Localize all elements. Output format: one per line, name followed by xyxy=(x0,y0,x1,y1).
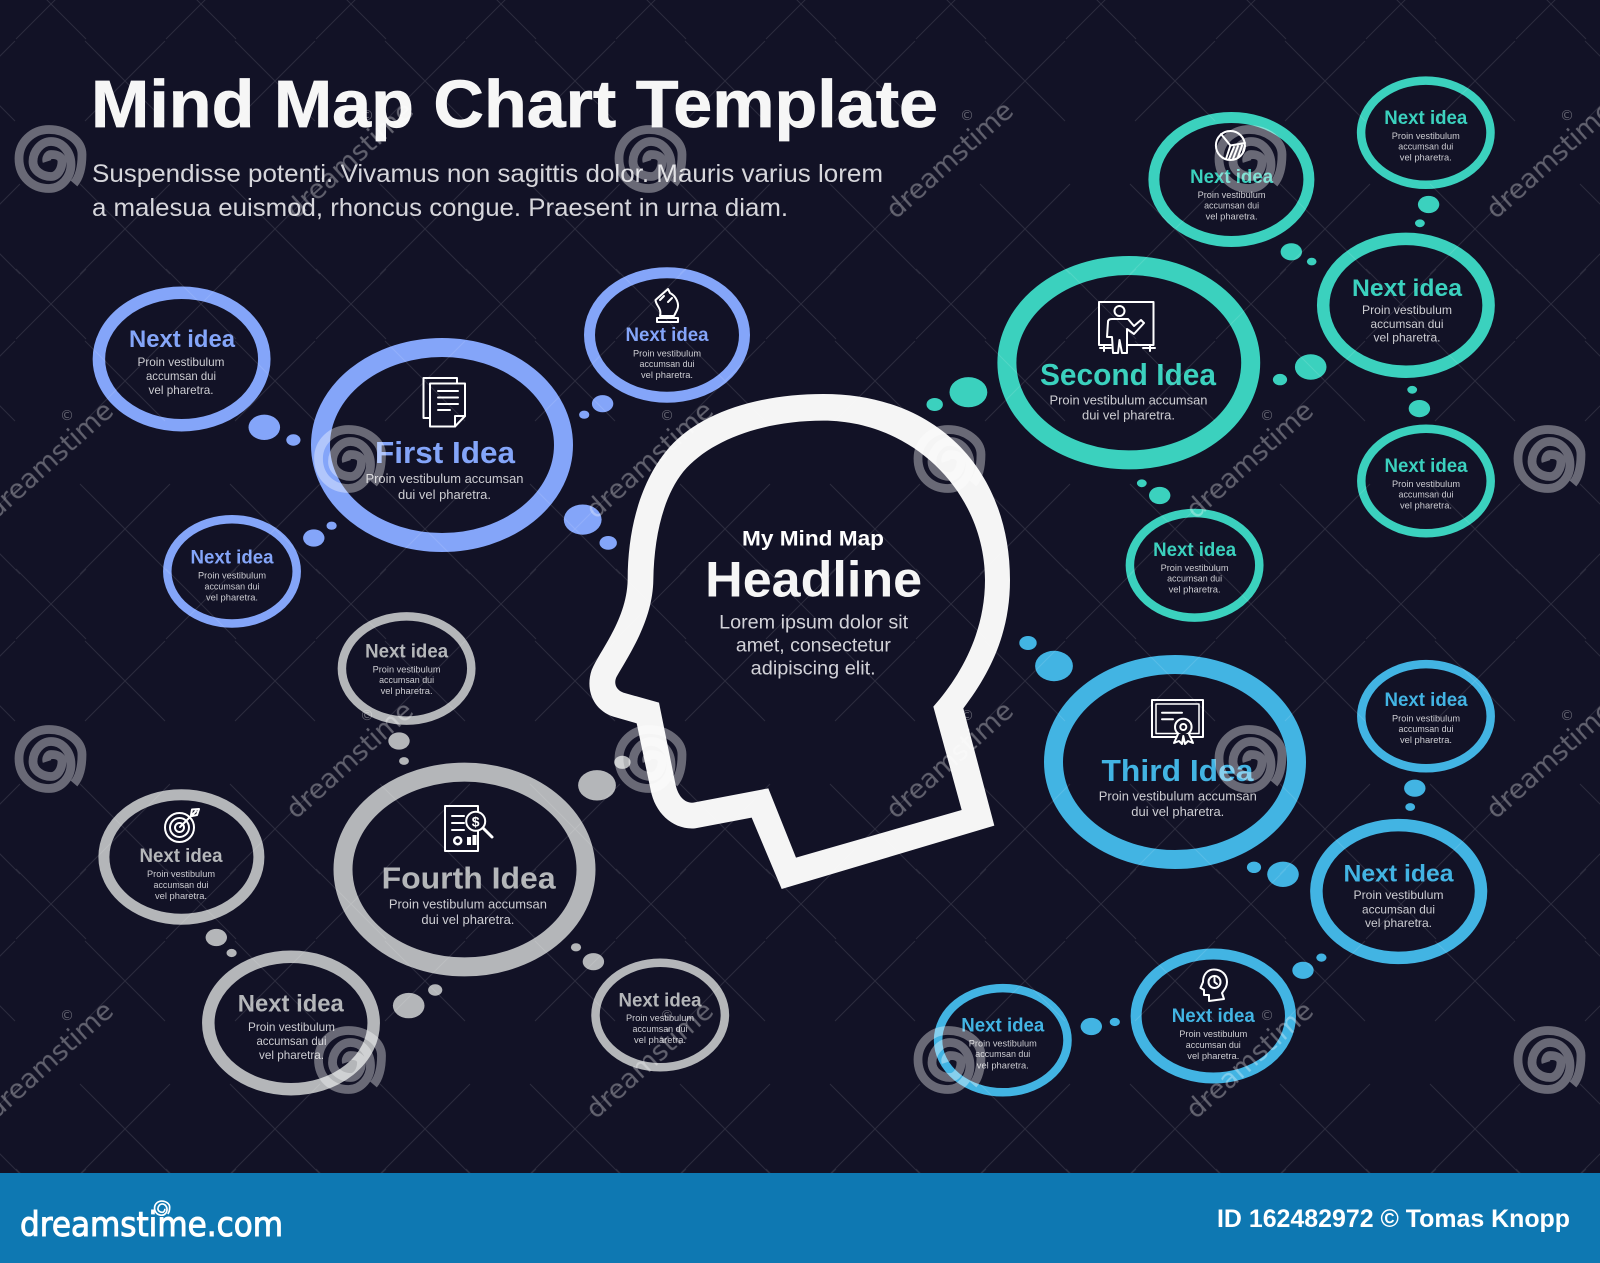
bubble: second idea xyxy=(1007,266,1251,460)
bubble: next idea with chess knight: accumsan dui xyxy=(640,359,694,370)
bubble: next idea top left: vel pharetra. xyxy=(148,383,214,397)
bubble: third idea xyxy=(1054,664,1296,860)
bubble: next idea top left: accumsan dui xyxy=(146,369,216,383)
bubble: next idea lower right: accumsan dui xyxy=(1398,490,1454,501)
headline text: amet, consectetur xyxy=(736,636,892,657)
head outline xyxy=(589,394,1010,889)
watermark overlay: dreamstime xyxy=(1180,995,1320,1125)
bubble: next idea bottom: vel pharetra. xyxy=(1169,585,1221,596)
bubble: third idea: dui vel pharetra. xyxy=(1131,804,1224,819)
watermark overlay: dreamstime xyxy=(580,995,720,1125)
bubble: next idea lower left: vel pharetra. xyxy=(206,592,258,603)
bubble: next idea lower left xyxy=(167,519,297,624)
bubble: next idea with target xyxy=(104,795,259,919)
icon: chess knight xyxy=(656,289,678,322)
bubble: next idea with chess knight xyxy=(590,273,744,397)
bubble: next idea bottom left: vel pharetra. xyxy=(977,1060,1029,1071)
headline text: Lorem ipsum dolor sit xyxy=(719,612,909,633)
bubble: next idea lower left: accumsan dui xyxy=(204,581,260,592)
icon: target with arrow xyxy=(165,809,199,842)
bubble: fourth idea: Fourth Idea xyxy=(382,861,556,896)
bubble: next idea with pie chart xyxy=(1154,118,1309,242)
watermark overlay: dreamstime xyxy=(280,695,420,825)
watermark overlay: © xyxy=(960,108,974,124)
bubble: next idea with chess knight: Next idea xyxy=(626,325,709,346)
watermark overlay: © xyxy=(660,1008,674,1024)
bubble: second idea: Proin vestibulum accumsan xyxy=(1050,392,1208,408)
bubble: next idea bottom left xyxy=(938,988,1068,1092)
bubble: next idea right: Proin vestibulum xyxy=(1354,888,1444,902)
bubble: next idea top right: accumsan dui xyxy=(1398,141,1453,152)
footer banner xyxy=(0,1173,1600,1263)
bubble: next idea bottom right: Proin vestibulum xyxy=(626,1013,694,1024)
bubble: next idea top: Next idea xyxy=(365,642,449,663)
subtitle text: a malesua euismod, rhoncus congue. Praesent in urna diam. xyxy=(92,194,788,222)
bubble: next idea with target: vel pharetra. xyxy=(155,891,207,902)
watermark overlay: dreamstime xyxy=(280,95,420,225)
bubble: next idea with pie chart: vel pharetra. xyxy=(1206,212,1258,223)
bubble: next idea bottom left: Proin vestibulum xyxy=(969,1039,1037,1050)
bubble: first idea: dui vel pharetra. xyxy=(398,487,491,502)
watermark overlay: dreamstime xyxy=(880,95,1020,225)
bubble: fourth idea: Proin vestibulum accumsan xyxy=(389,896,547,911)
bubble: next idea with chess knight: Proin vestibulum xyxy=(633,348,701,359)
watermark overlay: © xyxy=(1560,708,1574,724)
bubble: next idea bottom left: Proin vestibulum xyxy=(248,1020,335,1034)
watermark overlay: dreamstime xyxy=(580,395,720,525)
bubble: next idea upper right: Next idea xyxy=(1384,690,1468,711)
panel: second idea branch xyxy=(926,81,1491,618)
bubble: next idea lower left: Proin vestibulum xyxy=(198,570,266,581)
panel: third idea branch xyxy=(938,636,1491,1092)
bubble: next idea bottom right xyxy=(596,963,725,1067)
bubble: next idea bottom xyxy=(1130,513,1259,618)
watermark overlay: © xyxy=(60,1008,74,1024)
panel: fourth idea branch xyxy=(104,616,725,1089)
watermark overlay: © xyxy=(360,708,374,724)
bubble: next idea bottom: Proin vestibulum xyxy=(1161,563,1229,574)
bubble: next idea middle right xyxy=(1323,239,1489,372)
footer credit: ID 162482972 © Tomas Knopp xyxy=(1217,1205,1570,1233)
watermark overlay: dreamstime xyxy=(880,695,1020,825)
subtitle text: Suspendisse potenti. Vivamus non sagittis dolor. Mauris varius lorem xyxy=(92,160,883,188)
bubble: third idea: Third Idea xyxy=(1102,753,1254,788)
bubble: next idea middle right: Proin vestibulum xyxy=(1362,303,1452,317)
watermark overlay: © xyxy=(1260,408,1274,424)
bubble: next idea upper right: accumsan dui xyxy=(1398,724,1454,735)
icon: head with clock xyxy=(1200,970,1227,1001)
bubble: fourth idea xyxy=(343,772,586,967)
bubble: next idea lower left: Next idea xyxy=(190,548,274,569)
icon: certificate xyxy=(1152,700,1203,744)
bubble: next idea lower right xyxy=(1361,429,1491,533)
bubble: next idea lower right: Next idea xyxy=(1384,456,1468,477)
bubble: next idea lower right: Proin vestibulum xyxy=(1392,479,1460,490)
bubble: next idea with target: Proin vestibulum xyxy=(147,869,215,880)
footer logo: dreamstime.com xyxy=(20,1205,283,1245)
bubble: next idea with head clock: accumsan dui xyxy=(1186,1040,1241,1051)
bubble: next idea middle right: Next idea xyxy=(1352,275,1463,302)
bubble: next idea top left: Proin vestibulum xyxy=(138,355,224,369)
bubble: second idea: Second Idea xyxy=(1040,357,1217,392)
icon: financial report with magnifier: $ xyxy=(472,814,480,830)
watermark overlay: © xyxy=(1560,108,1574,124)
connector dots: blue xyxy=(248,395,617,550)
bubble: next idea right xyxy=(1316,825,1481,958)
bubble: next idea top right xyxy=(1361,81,1491,185)
bubble: next idea upper right: vel pharetra. xyxy=(1400,735,1452,746)
bubble: next idea with head clock xyxy=(1136,954,1291,1078)
watermark overlay: © xyxy=(60,408,74,424)
headline text: My Mind Map xyxy=(742,528,884,551)
bubble: next idea top left xyxy=(99,293,264,425)
watermark overlay: © xyxy=(960,708,974,724)
bubble: next idea bottom right: vel pharetra. xyxy=(634,1035,686,1046)
bubble: next idea upper right xyxy=(1361,664,1491,768)
watermark overlay: dreamstime xyxy=(1180,395,1320,525)
bubble: first idea: Proin vestibulum accumsan xyxy=(366,471,524,486)
bubble: next idea top: Proin vestibulum xyxy=(373,664,441,676)
watermark overlay: © xyxy=(660,408,674,424)
connector dots: teal xyxy=(926,196,1439,504)
bubble: first idea: First Idea xyxy=(375,435,516,470)
bubble: next idea top right: vel pharetra. xyxy=(1400,152,1452,163)
bubble: next idea bottom left: accumsan dui xyxy=(256,1034,326,1048)
subtitle text xyxy=(92,160,883,222)
bubble: next idea with pie chart: accumsan dui xyxy=(1204,201,1259,212)
icon: pie chart xyxy=(1216,131,1245,160)
connector dots: grey xyxy=(206,732,631,1018)
bubble: next idea with head clock: Proin vestibulum xyxy=(1179,1029,1247,1040)
watermark overlay: © xyxy=(360,108,374,124)
bubble: next idea top left: Next idea xyxy=(129,326,236,353)
headline text: Headline xyxy=(705,552,922,608)
bubble: next idea middle right: accumsan dui xyxy=(1370,317,1444,331)
bubble: next idea upper right: Proin vestibulum xyxy=(1392,713,1460,724)
bubble: fourth idea: dui vel pharetra. xyxy=(421,912,514,927)
bubble: next idea bottom: accumsan dui xyxy=(1167,574,1222,585)
bubble: next idea bottom left: accumsan dui xyxy=(975,1049,1030,1060)
bubble: third idea: Proin vestibulum accumsan xyxy=(1099,788,1257,804)
bubble: first idea xyxy=(320,348,564,542)
bubble: next idea with chess knight: vel pharetra. xyxy=(641,370,693,381)
bubble: next idea top right: Proin vestibulum xyxy=(1392,131,1460,142)
bubble: next idea top xyxy=(342,616,471,721)
bubble: next idea with target: accumsan dui xyxy=(154,880,208,891)
bubble: next idea bottom left: vel pharetra. xyxy=(259,1048,324,1062)
bubble: next idea right: accumsan dui xyxy=(1362,902,1435,916)
headline text xyxy=(705,528,922,679)
bubble: next idea bottom right: Next idea xyxy=(618,990,702,1011)
bubble: next idea middle right: vel pharetra. xyxy=(1374,331,1440,345)
central head with headline xyxy=(589,394,1010,889)
bubble: next idea with head clock: vel pharetra. xyxy=(1187,1051,1239,1062)
title: Mind Map Chart Template xyxy=(91,67,938,142)
bubble: next idea with pie chart: Proin vestibulum xyxy=(1198,190,1266,201)
panel: first idea branch xyxy=(99,273,744,624)
bubble: next idea with pie chart: Next idea xyxy=(1190,167,1274,188)
bubble: next idea bottom right: accumsan dui xyxy=(632,1024,688,1035)
icon: documents xyxy=(424,378,465,426)
bubble: next idea right: vel pharetra. xyxy=(1365,916,1432,930)
icon: financial report with magnifier xyxy=(445,806,492,851)
bubble: next idea bottom left xyxy=(208,957,374,1089)
bubble: next idea bottom left: Next idea xyxy=(238,991,344,1018)
bubble: next idea top right: Next idea xyxy=(1384,108,1468,129)
bubble: next idea with head clock: Next idea xyxy=(1172,1006,1255,1027)
bubble: second idea: dui vel pharetra. xyxy=(1082,408,1175,423)
watermark overlay: © xyxy=(1260,1008,1274,1024)
bubble: next idea bottom left: Next idea xyxy=(961,1015,1045,1036)
headline text: adipiscing elit. xyxy=(751,658,876,679)
connector dots: sky blue xyxy=(1019,636,1426,1035)
bubble: next idea bottom: Next idea xyxy=(1153,540,1237,561)
icon: teacher at board xyxy=(1099,302,1155,353)
bubble: next idea top: accumsan dui xyxy=(379,675,434,686)
bubble: next idea lower right: vel pharetra. xyxy=(1400,501,1452,512)
bubble: next idea right: Next idea xyxy=(1344,861,1454,888)
bubble: next idea with target: Next idea xyxy=(140,846,223,867)
bubble: next idea top: vel pharetra. xyxy=(381,686,433,697)
